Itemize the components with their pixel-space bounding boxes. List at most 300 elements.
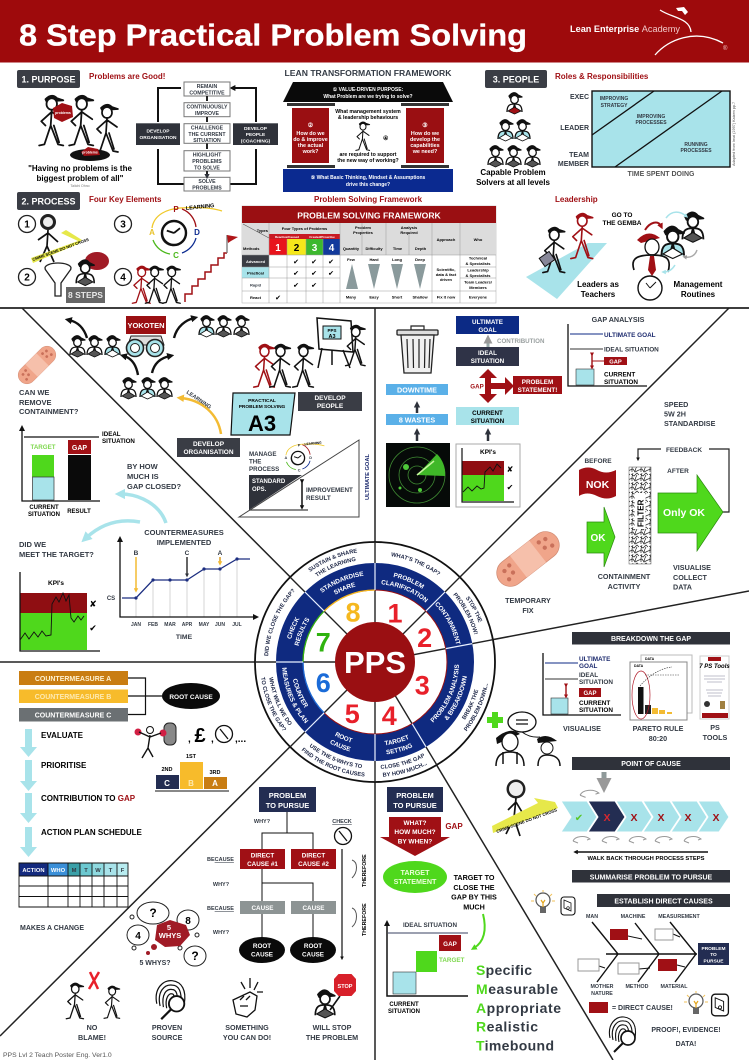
box: ideal situation: SITUATION: [471, 358, 505, 365]
foundation bar: ⑤ What Basic Thinking, Mindset & Assumptions: [311, 175, 426, 181]
icon: green plus: [487, 712, 503, 728]
blue ring step names: CLARIFICATION: [382, 580, 428, 602]
element 4: number: 4: [120, 272, 126, 284]
chart: pareto: DATA: [645, 657, 655, 661]
table: framework: Rapid: [250, 282, 262, 288]
diagram: standard ops improvement slope: ULTIMATE GOAL: [365, 454, 371, 500]
label: visualise: VISUALISE: [563, 724, 601, 733]
table: framework: 2: [294, 243, 300, 254]
pillar 2: ②: [308, 122, 314, 129]
label: countermeasures implemented: COUNTERMEASURES: [144, 528, 224, 537]
panel: gap analysis: IDEAL SITUATION: [604, 346, 659, 354]
pillar 2: the actual: [298, 143, 324, 149]
chart: time spent doing: TEAM: [569, 152, 589, 159]
flow: remain competitive cycle: CONTINUOUSLY: [186, 104, 228, 110]
table: framework: ✔: [293, 270, 299, 278]
icons: bulb and switch: [531, 890, 575, 915]
wheel: PPS eight steps: [254, 541, 496, 783]
flow: remain competitive cycle: IMPROVE: [195, 111, 219, 117]
table: framework: 1: [275, 243, 281, 254]
label: temporary fix: TEMPORARY: [505, 596, 551, 605]
table: framework: Properties: [353, 230, 374, 235]
box: develop organisation: [177, 438, 240, 457]
table: framework: Scientific,: [437, 267, 455, 272]
text: speed 5W 2H standardise: [664, 400, 716, 428]
list: SMART: Specific: [476, 962, 532, 978]
label: countermeasures implemented: [144, 528, 224, 547]
chevrons: process steps: X: [603, 812, 611, 824]
clouds: 5 whys: 8: [185, 916, 191, 927]
subheading: leadership: Leadership: [555, 195, 598, 204]
chart: steps to ideal situation: SITUATION: [388, 1009, 420, 1015]
text: go to the gemba: [602, 212, 642, 227]
chevrons: process steps: X: [712, 812, 720, 824]
arrow: walk back: WALK BACK THROUGH PROCESS STEPS: [588, 856, 705, 862]
steps: evaluate to action plan: EVALUATE: [41, 731, 84, 740]
chart: improvement line over time: MAY: [199, 622, 210, 628]
table: framework: Many: [346, 294, 357, 300]
table: action plan: WHO: [51, 868, 66, 874]
box: ideal situation: IDEAL: [478, 350, 497, 357]
element 2: number: [18, 268, 36, 286]
chart: target versus result: TARGET: [31, 444, 56, 451]
panel: 3. people: [476, 70, 736, 187]
illustration: no blame: [66, 972, 120, 1019]
pillar 3: develop the: [410, 137, 440, 143]
table: framework: Short: [392, 294, 403, 300]
flow: remain competitive cycle: HIGHLIGHT: [193, 152, 222, 158]
flow: remain competitive cycle: TO SOLVE: [194, 166, 220, 172]
label: before: BEFORE: [584, 458, 612, 465]
table: framework: [242, 206, 496, 303]
middle: management system: ④: [383, 135, 389, 142]
flow: remain competitive cycle: [136, 82, 278, 192]
table: framework: & Specialists: [466, 261, 491, 266]
subheading: problems are good: Problems are Good!: [89, 72, 165, 81]
outer ring questions: USE THE 5-WHYS TO: [310, 744, 362, 768]
illustration: boxer and criteria: ,: [211, 734, 214, 745]
chart: improvement line over time: B: [134, 550, 139, 557]
heading: LEAN TRANSFORMATION FRAMEWORK: [285, 68, 452, 78]
arrows: curved walk back: [573, 790, 701, 843]
table: framework: ✔: [293, 258, 299, 266]
pillar 2: [287, 108, 335, 168]
table: framework: ✔: [311, 270, 317, 278]
table: framework: Everyone: [469, 294, 488, 300]
chart: time spent doing: RUNNING: [684, 142, 708, 148]
bar: establish direct causes: [597, 894, 730, 907]
question: can we remove containment: CONTAINMENT?: [19, 407, 79, 416]
text: proof evidence data: DATA!: [676, 1041, 696, 1048]
arrow: only OK: [658, 475, 723, 551]
pillar 2: do & improve: [293, 137, 328, 143]
table: framework: Technical: [469, 256, 487, 260]
blue ring step names: COUNTER: [293, 678, 308, 708]
flow: remain competitive cycle: PROBLEMS: [192, 186, 222, 192]
house roof: [283, 82, 453, 106]
caption: capable problem solvers: Solvers at all levels: [476, 178, 550, 187]
pillar 3: capabilities: [410, 143, 440, 149]
table: framework: ✔: [311, 258, 317, 266]
list: SMART: Timebound: [476, 1038, 554, 1054]
panel: gap analysis: SITUATION: [604, 379, 638, 386]
arrow: learning: LEARNING: [185, 390, 212, 411]
blue ring step names: [282, 571, 467, 754]
element 3: PDCA learning cycle: [149, 203, 222, 260]
question: did we meet the target: DID WE: [19, 540, 46, 549]
label: downtime: DOWNTIME: [397, 386, 437, 394]
caption: leaders as teachers: Teachers: [581, 290, 616, 299]
illustration: coach dialogue: [496, 712, 560, 766]
arrow: learning: [181, 390, 221, 434]
illustration: presenting A3: A3: [328, 334, 336, 340]
text: speed 5W 2H standardise: 5W 2H: [664, 410, 686, 418]
illustration: man with stop sign: [315, 974, 356, 1018]
box: problem to pursue: [387, 787, 443, 812]
label: manage the process: THE: [249, 458, 261, 466]
icon: small PDCA cycle: P: [298, 443, 301, 447]
table: framework: Problem: [355, 225, 371, 230]
text: proof evidence data: PROOF!, EVIDENCE!: [651, 1027, 721, 1034]
table: framework: Depth: [415, 246, 427, 251]
card: practical problem solving A3: PRACTICAL: [248, 398, 276, 404]
panel: step 5 root cause: [127, 787, 368, 967]
blue ring step names: SHARE: [334, 582, 356, 594]
label: will stop the problem: [306, 1023, 358, 1042]
check and therefore: THEREFORE: [362, 854, 368, 887]
flow: remain competitive cycle: SOLVE: [198, 179, 216, 185]
icon: pointing fist: [233, 978, 263, 1017]
panel: step 3 breakdown the gap: [487, 632, 730, 1052]
table: framework: Required: [400, 230, 418, 235]
box: current situation: SITUATION: [471, 418, 505, 425]
block: filter: FILTER: [636, 499, 646, 527]
panel: gap analysis: GAP ANALYSIS: [592, 315, 645, 324]
heading: 2. PROCESS: [17, 192, 80, 210]
outer ring questions: WHAT'S THE GAP?: [392, 552, 440, 575]
blue ring step names: & BREAKDOWN: [444, 676, 467, 720]
table: action plan: ACTION: [22, 868, 45, 874]
blue ring step names: MEASURES & PLAN: [282, 668, 308, 724]
logo: Lean Enterprise Academy: [570, 7, 728, 55]
outer ring questions: PROBLEM DOWN...: [464, 684, 488, 732]
chart: KPI's: ✘: [89, 600, 97, 610]
element 4: number: [114, 268, 132, 286]
step numbers: 8: [345, 598, 361, 628]
clouds: 5 whys: ?: [149, 906, 157, 920]
table: action plan: W: [95, 868, 101, 874]
fishbone diagram: MEASUREMENT: [658, 914, 701, 920]
table: framework: & Specialists: [466, 273, 491, 278]
steps: evaluate to action plan: CONTRIBUTION TO GAP: [41, 794, 136, 803]
house roof: ① VALUE-DRIVEN PURPOSE:: [333, 87, 404, 93]
step numbers: 6: [316, 668, 331, 698]
chart: pareto: [630, 655, 692, 720]
step numbers: 2: [417, 623, 432, 653]
box: problem statement: [513, 376, 562, 394]
table: framework: 3: [312, 243, 318, 254]
chart: improvement line over time: JUL: [232, 622, 242, 628]
chart: improvement line over time: A: [218, 550, 223, 557]
ellipse: target statement: STATEMENT: [394, 877, 437, 886]
pillar 3: [401, 108, 449, 168]
caption: management routines: [674, 280, 723, 299]
box: problem to pursue: TO PURSUE: [266, 801, 309, 810]
label: no blame: [78, 1023, 106, 1042]
box: develop people: (COACHING): [241, 138, 271, 144]
diagram: standard ops improvement slope: [239, 440, 371, 517]
illustration: people carrying problem: [39, 96, 118, 161]
box: develop people: [233, 123, 278, 145]
label: manage the process: [249, 451, 279, 473]
centre: PPS: [335, 622, 415, 702]
steps: evaluate to action plan: PRIORITISE: [41, 761, 87, 770]
table: framework: Difficulty: [365, 246, 383, 251]
table: framework: Advanced: [246, 259, 266, 264]
boxes: direct causes: DIRECT: [251, 852, 274, 860]
table: framework: Few: [347, 257, 356, 262]
chart: improvement line over time: [107, 536, 259, 641]
subheading: four key elements: Four Key Elements: [89, 195, 162, 204]
element 1: number: [18, 216, 36, 232]
box: develop organisation: ORGANISATION: [140, 135, 177, 141]
pillar 3: How do we: [411, 131, 439, 137]
panel: 1. purpose: [17, 70, 278, 192]
box: problem to pursue: [259, 787, 316, 812]
table: action plan: M: [72, 868, 77, 874]
illustration: leaders as teachers: [526, 214, 607, 299]
box: develop people: [298, 392, 362, 411]
label: downtime: [386, 384, 448, 395]
box: develop organisation: DEVELOP: [193, 441, 225, 448]
diagram: standard ops improvement slope: RESULT: [306, 495, 331, 502]
bar: point of cause: POINT OF CAUSE: [621, 761, 681, 768]
chevrons: process steps: ✔: [575, 813, 583, 824]
chart: steps to ideal situation: CURRENT: [389, 1002, 419, 1008]
question: can we remove containment: CAN WE: [19, 388, 49, 397]
label: manage the process: PROCESS: [249, 466, 279, 473]
subheading: Problem Solving Framework: [314, 195, 423, 204]
block: filter: [629, 467, 651, 564]
table: framework: Team Leaders/: [464, 280, 493, 284]
table: framework: Who: [474, 237, 483, 242]
arrow: down to point of cause: [602, 772, 606, 784]
chart: podium: C: [164, 779, 170, 788]
label: after: AFTER: [667, 468, 689, 475]
clouds: 5 whys: ?: [191, 949, 199, 963]
box: develop organisation: [136, 123, 180, 145]
step numbers: 3: [415, 670, 430, 700]
steps: evaluate to action plan: [41, 731, 143, 837]
text: target to close the gap: MUCH: [463, 902, 485, 912]
step numbers: 4: [382, 701, 397, 731]
ellipses: root causes: ROOT: [253, 943, 271, 950]
box: develop people: DEVELOP: [314, 395, 346, 402]
text: target to close the gap: CLOSE THE: [453, 883, 495, 892]
icon: small PDCA cycle: A: [285, 456, 288, 460]
element 2: funnel to 8 steps: [45, 252, 109, 303]
illustration: management routines: [633, 212, 703, 300]
illustration: people carrying problem: problems: [55, 111, 71, 115]
table: framework: data & fact: [436, 272, 457, 277]
label: pareto rule: PARETO RULE: [633, 724, 684, 733]
badge: NOK: NOK: [586, 479, 610, 491]
fishbone diagram: NATURE: [591, 991, 613, 997]
card: practical problem solving A3: PROBLEM SOLVING: [239, 404, 286, 410]
arrow: contribution: [488, 338, 545, 347]
flow: remain competitive cycle: PROBLEMS: [192, 159, 222, 165]
house roof: What Problem are we trying to solve?: [323, 94, 413, 100]
flow: remain competitive cycle: SITUATION: [193, 138, 221, 144]
element 3: PDCA learning cycle: A: [149, 228, 155, 237]
chart: KPI's: ✔: [507, 483, 513, 492]
flow: remain competitive cycle: CHALLENGE: [191, 126, 224, 132]
chart: improvement line over time: CS: [107, 596, 115, 602]
question: gap closed: [127, 462, 181, 491]
panel: step 8 sustain: [15, 343, 259, 651]
arrow: green: [474, 914, 485, 948]
chart: visualise gap: GOAL: [579, 663, 598, 670]
chart: pareto: DATA: [634, 664, 644, 668]
chart: KPI's: ✘: [507, 465, 514, 474]
chart: KPI's: ✔: [89, 624, 97, 634]
chart: visualise gap: [543, 653, 621, 715]
logo: Lean Enterprise Academy: Lean Enterprise Academy: [570, 24, 680, 34]
label: something you can do: [223, 1023, 271, 1042]
chart: visualise gap: SITUATION: [579, 707, 613, 714]
table: framework: Types: [257, 228, 269, 233]
box: ultimate goal: [456, 316, 519, 334]
list: SMART: Appropriate: [476, 1000, 561, 1016]
element 2: funnel to 8 steps: 8 STEPS: [68, 290, 103, 300]
table: framework: Shallow: [412, 294, 428, 300]
arrow: what how much by when: WHAT?: [404, 820, 427, 827]
title: 8 Step Practical Problem Solving: [19, 18, 527, 52]
label: something you can do: YOU CAN DO!: [223, 1033, 271, 1042]
chart: improvement line over time: C: [185, 550, 190, 557]
heading: 1. PURPOSE: [17, 70, 80, 88]
icon: temporary fix band-aid: [491, 526, 565, 592]
table: framework: ✔: [328, 270, 334, 278]
arrow: [416, 432, 418, 441]
table: framework: Created/Proactive: [309, 235, 335, 239]
chart: time spent doing: EXEC: [570, 94, 589, 101]
label: no blame: NO: [87, 1023, 98, 1032]
caption: leaders as teachers: [577, 280, 619, 299]
table: framework: driven: [440, 277, 453, 282]
chart: podium: 1ST: [186, 754, 197, 760]
diagram: standard ops improvement slope: IMPROVEMENT: [306, 487, 353, 494]
table: framework: Long: [392, 257, 402, 262]
ellipses: root causes: CAUSE: [251, 952, 273, 958]
chart: improvement line over time: JAN: [131, 622, 141, 628]
boxes: direct causes: [240, 849, 336, 869]
middle: management system: What management system: [335, 109, 401, 115]
label: yokoten: YOKOTEN: [127, 321, 165, 330]
table: framework: Quantity: [343, 246, 360, 251]
chart: improvement line over time: FEB: [148, 622, 158, 628]
step numbers: 7: [316, 628, 331, 658]
document: PS tools: 7 PS Tools: [699, 664, 730, 670]
table: framework: Practical: [247, 270, 264, 276]
table: framework: Fix it now: [437, 294, 456, 300]
table: action plan: [19, 863, 128, 907]
boxes: direct causes: DIRECT: [302, 852, 325, 860]
fishbone diagram: METHOD: [626, 984, 649, 990]
box: current situation: [456, 407, 519, 425]
element 1: investigator with tape: CRIME SCENE DO NOT CROSS: [32, 237, 90, 262]
icon: binoculars: [126, 336, 164, 356]
question: can we remove containment: REMOVE: [19, 398, 52, 407]
diagram: standard ops improvement slope: OPS.: [252, 487, 267, 493]
blue ring step names: ROOT: [335, 732, 353, 742]
chart: KPI's: [20, 572, 100, 651]
label: temporary fix: FIX: [522, 606, 534, 615]
pillar 2: How do we: [296, 131, 325, 137]
panel: gap analysis: GAP: [609, 360, 622, 366]
label: containment activity: [598, 572, 651, 591]
fishbone diagram: MATERIAL: [661, 984, 688, 990]
arrow: OK: [587, 507, 615, 567]
chart: target versus result: SITUATION: [102, 438, 135, 445]
heading: 2. PROCESS: 2. PROCESS: [21, 196, 76, 206]
panel: gap analysis: CURRENT: [604, 372, 635, 378]
chart: time spent doing: LEADER: [560, 125, 589, 132]
element 2: number: 2: [24, 272, 30, 284]
step numbers: 5: [345, 699, 360, 729]
legend: direct cause: = DIRECT CAUSE!: [612, 1005, 673, 1012]
table: framework: ✔: [293, 282, 299, 290]
bar: summarise problem to pursue: [572, 870, 730, 882]
arrow: [487, 432, 489, 441]
label: no blame: BLAME!: [78, 1033, 106, 1042]
bar: point of cause: [572, 757, 730, 770]
check and therefore: CHECK: [332, 819, 352, 825]
labels: why and because: [207, 819, 271, 936]
panel: bottom principles: [66, 972, 358, 1042]
panel: step 2 containment: [491, 400, 729, 615]
box: develop people: DEVELOP: [244, 126, 268, 132]
clouds: 5 whys: [127, 902, 206, 967]
spokes: sector dividers: [0, 308, 749, 1060]
ellipse: root cause: [162, 683, 220, 709]
flow: feedback line: [638, 447, 729, 512]
chart: target versus result: RESULT: [67, 509, 91, 515]
box: ideal situation: [456, 347, 519, 366]
arrow: gap cross: [470, 369, 514, 403]
arrow: what how much by when: BY WHEN?: [398, 838, 432, 846]
ellipse: target statement: [383, 861, 447, 893]
outer ring questions: TO CLOSE THE GAP?: [261, 676, 286, 730]
text: proof evidence data: [651, 1027, 721, 1048]
icon: trash can: [397, 326, 438, 373]
label: countermeasures implemented: IMPLEMENTED: [157, 538, 212, 547]
subheading: roles and responsibilities: Roles & Responsibilities: [555, 72, 649, 81]
chart: time spent doing: PROCESSES: [680, 148, 712, 154]
question: gap closed: BY HOW: [127, 462, 159, 471]
text: speed 5W 2H standardise: SPEED: [664, 400, 688, 409]
table: framework: PROBLEM SOLVING FRAMEWORK: [297, 210, 442, 220]
label: proven source: PROVEN: [152, 1023, 182, 1032]
label: visualise collect data: [673, 563, 711, 592]
illustration: boxer and criteria: ,...: [235, 734, 246, 745]
illustration: investigator with tape: [492, 780, 558, 836]
box: develop organisation: ORGANISATION: [183, 449, 234, 456]
chart: time spent doing: TIME SPENT DOING: [628, 171, 695, 178]
element 3: PDCA learning cycle: LEARNING: [186, 203, 215, 212]
box: current situation: CURRENT: [472, 410, 503, 417]
table: framework: Deep: [415, 257, 425, 262]
